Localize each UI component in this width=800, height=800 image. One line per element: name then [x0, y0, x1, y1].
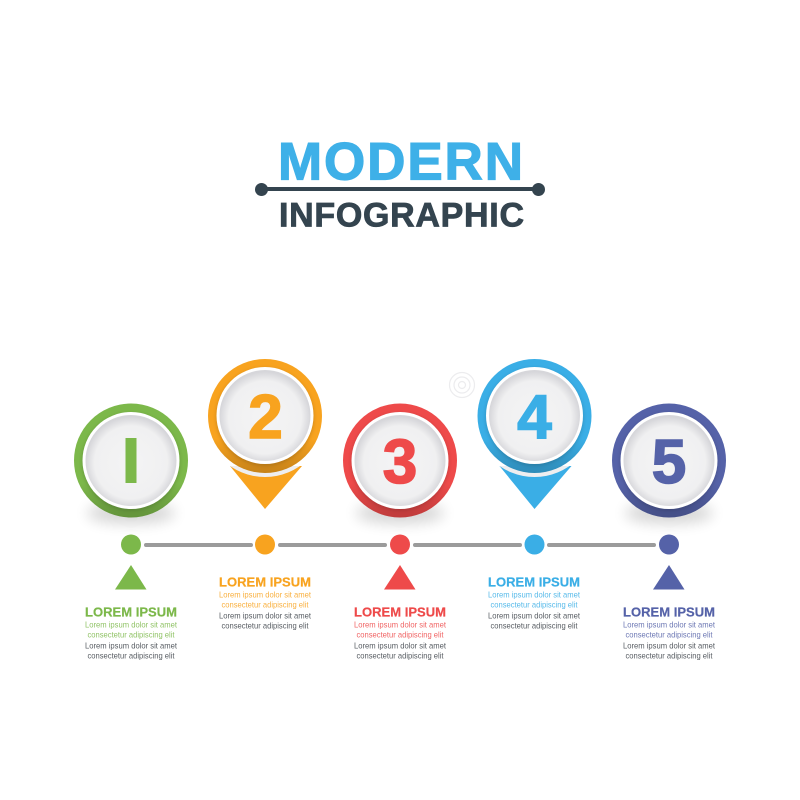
text block: step 3 — [354, 604, 447, 660]
text block: step 5 — [623, 604, 716, 660]
text block: step 2 — [219, 574, 312, 630]
arrow: step 1 — [115, 565, 146, 590]
text block: step 2: Lorem ipsum dolor sit amet — [219, 610, 312, 620]
step 3 badge — [343, 404, 457, 524]
text block: step 1: consectetur adipiscing elit — [88, 650, 175, 660]
text block: step 1: Lorem ipsum dolor sit amet — [85, 640, 178, 650]
timeline dot 3 — [390, 534, 410, 554]
text block: step 5: Lorem ipsum dolor sit amet — [623, 620, 716, 630]
title divider line — [255, 183, 545, 196]
text block: step 3: consectetur adipiscing elit — [356, 650, 444, 660]
text block: step 2: LOREM IPSUM — [219, 574, 311, 590]
arrow: step 5 — [653, 565, 684, 590]
text block: step 2: Lorem ipsum dolor sit amet — [219, 590, 312, 600]
text block: step 5: Lorem ipsum dolor sit amet — [623, 640, 716, 650]
text block: step 1: consectetur adipiscing elit — [88, 630, 175, 640]
text block: step 3: LOREM IPSUM — [354, 604, 446, 620]
text block: step 3: consectetur adipiscing elit — [356, 630, 444, 640]
text block: step 1: LOREM IPSUM — [85, 604, 177, 620]
number 5: 5 — [652, 428, 686, 497]
text block: step 4: consectetur adipiscing elit — [490, 620, 578, 630]
text block: step 4: Lorem ipsum dolor sit amet — [488, 610, 581, 620]
text block: step 5: consectetur adipiscing elit — [626, 650, 713, 660]
text block: step 4 — [488, 574, 581, 630]
number 1: 1 — [114, 428, 148, 497]
text block: step 2: consectetur adipiscing elit — [222, 600, 309, 610]
text block: step 2: consectetur adipiscing elit — [222, 620, 309, 630]
timeline dot 5 — [659, 534, 679, 554]
step 1 badge — [74, 404, 188, 524]
number 3: 3 — [383, 428, 417, 497]
text block: step 5: consectetur adipiscing elit — [626, 630, 713, 640]
step 5 badge — [612, 404, 726, 524]
arrow: step 3 — [384, 565, 416, 590]
timeline dot 1 — [121, 534, 141, 554]
number 4: 4 — [517, 383, 552, 452]
text block: step 4: LOREM IPSUM — [488, 574, 580, 590]
number 2: 2 — [248, 383, 283, 452]
text block: step 1: Lorem ipsum dolor sit amet — [85, 620, 178, 630]
step 2 pin — [204, 355, 326, 509]
text block: step 4: Lorem ipsum dolor sit amet — [488, 590, 581, 600]
text block: step 5: LOREM IPSUM — [623, 604, 715, 620]
text block: step 1 — [85, 604, 178, 660]
text block: step 4: consectetur adipiscing elit — [490, 600, 578, 610]
text block: step 3: Lorem ipsum dolor sit amet — [354, 640, 447, 650]
timeline dot 4 — [524, 534, 544, 554]
timeline dot 2 — [255, 534, 275, 554]
text block: step 3: Lorem ipsum dolor sit amet — [354, 620, 447, 630]
title word: modern: MODERN — [278, 132, 523, 192]
title — [255, 132, 545, 234]
timeline — [121, 534, 679, 554]
step 4 pin — [474, 355, 596, 509]
title word: infographic: INFOGRAPHIC — [279, 196, 524, 234]
